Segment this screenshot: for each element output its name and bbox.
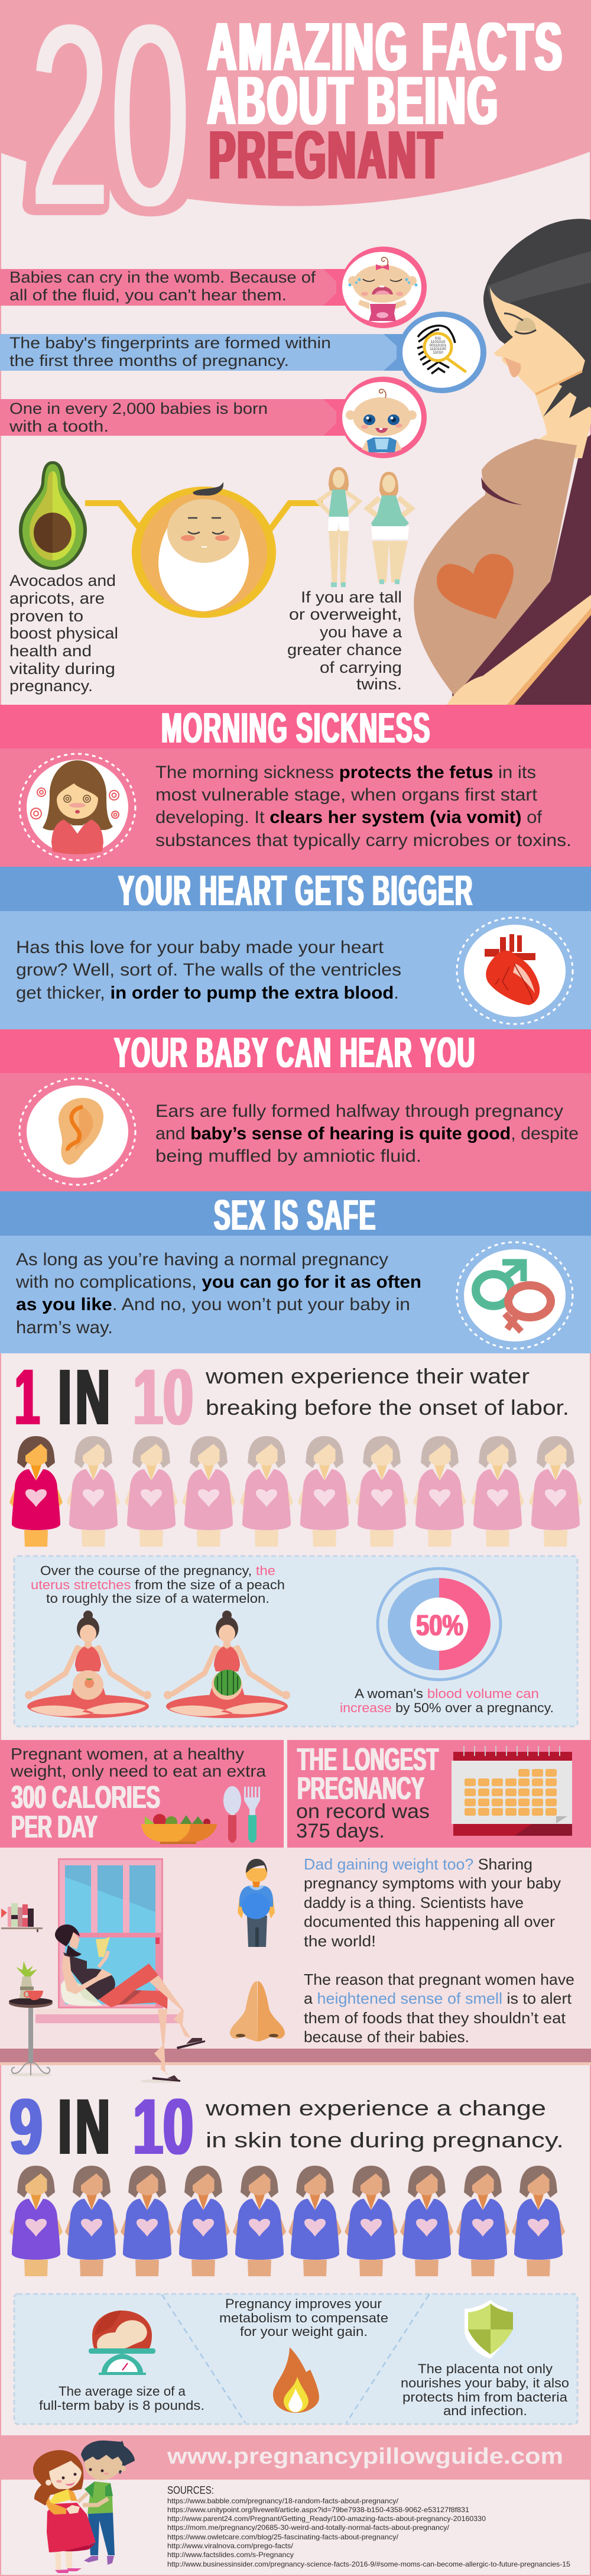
- icon: flame: [273, 2347, 319, 2413]
- text: The morning sickness protects the fetus in its: [155, 763, 536, 782]
- text: avocados: Avocados and: [9, 572, 116, 589]
- text: [155, 763, 571, 850]
- text: metabolism: metabolism to compensate: [219, 2311, 388, 2325]
- panel: 300 calories: weight, only need to eat an extra: [10, 1762, 266, 1780]
- text: as you like . And no, you won’t put your baby in: [16, 1295, 410, 1314]
- dashed panel: baby size, metabolism, placenta: [14, 2294, 577, 2424]
- panel: longest pregnancy: PREGNANCY: [297, 1771, 424, 1806]
- icon: shield: [465, 2300, 517, 2358]
- sources list: [167, 2484, 570, 2568]
- stat: 9 in 10: in skin tone during pregnancy.: [206, 2128, 564, 2152]
- stat: 1 in 10: 10: [133, 1353, 193, 1441]
- sources list: http://www.viralnova.com/prego-facts/: [167, 2542, 294, 2550]
- text: uterus: uterus stretches from the size of a peach: [31, 1577, 285, 1592]
- panel: 300 calories: 300 CALORIES: [11, 1780, 160, 1815]
- text: metabolism: Pregnancy improves your: [225, 2296, 382, 2311]
- text: placenta: nourishes your baby, it also: [401, 2376, 569, 2390]
- icon: gender symbols: [457, 1242, 573, 1349]
- text: average size: full-term baby is 8 pounds.: [39, 2398, 204, 2413]
- illustration: bookshelf: [1, 1903, 43, 1932]
- icon: salad bowl: [141, 1814, 217, 1844]
- text: sense of smell: The reason that pregnant women have: [304, 1971, 574, 1988]
- pictogram row: 1 of 10 women: [9, 1436, 582, 1547]
- icon: yoga woman with watermelon: [164, 1611, 290, 1718]
- text: uterus: to roughly the size of a watermelon.: [46, 1591, 269, 1606]
- icon: fingerprint under magnifier: 11101100: [430, 347, 446, 351]
- text: substances that typically carry microbes or toxins.: [155, 831, 571, 850]
- chart: 50 percent donut: [378, 1569, 501, 1680]
- text: sense of smell: because of their babies.: [304, 2028, 469, 2046]
- panel: sex is safe: [0, 1191, 591, 1353]
- ribbon: fingerprints: [0, 334, 408, 371]
- text: placenta: and infection.: [443, 2403, 527, 2418]
- panel: 300 calories: Pregnant women, at a healthy: [11, 1745, 244, 1763]
- panel: your baby can hear you: [0, 1029, 591, 1191]
- text: uterus: [31, 1563, 285, 1606]
- icon: fingerprint under magnifier: 11010: [433, 351, 443, 355]
- text: blood volume: A woman's blood volume can: [355, 1686, 539, 1701]
- text: avocados: [9, 572, 118, 695]
- text: average size: The average size of a: [59, 2384, 186, 2399]
- text: twins: greater chance: [287, 641, 402, 659]
- text: blood volume: increase by 50% over a pregnancy.: [340, 1700, 554, 1715]
- text: [15, 1250, 421, 1337]
- sources list: https://mom.me/pregnancy/20685-30-weird-and-totally-normal-facts-about-pregnancy/: [167, 2523, 450, 2532]
- sources list: http://www.parent24.com/Pregnant/Getting_Ready/100-amazing-facts-about-pregnancy-20160330: [167, 2515, 486, 2523]
- text: Ears are fully formed halfway through pregnancy: [155, 1101, 563, 1121]
- text: twins: twins.: [356, 675, 402, 693]
- sources list: http://www.factslides.com/s-Pregnancy: [167, 2551, 294, 2559]
- text: dad weight: daddy is a thing. Scientists have: [304, 1894, 524, 1911]
- header banner: [0, 0, 591, 216]
- footer band with website: www.pregnancypillowguide.com: [167, 2444, 563, 2469]
- sources list: https://www.unitypoint.org/livewell/article.aspx?id=79be7938-b150-4358-9062-e53127f8f831: [167, 2506, 469, 2514]
- ribbon: babies cry: all of the fluid, you can't hear them.: [9, 286, 287, 304]
- icon: fingerprint under magnifier: [398, 312, 486, 393]
- text: [16, 938, 401, 1003]
- stat: 9 in 10: women experience a change: [205, 2096, 546, 2120]
- sources list: https://www.babble.com/pregnancy/18-random-facts-about-pregnancy/: [167, 2497, 399, 2505]
- text: [155, 1101, 579, 1166]
- text: metabolism: [219, 2296, 388, 2339]
- ribbon: fingerprints: the first three months of pregnancy.: [9, 352, 289, 370]
- stat: 9 in 10: [9, 2083, 564, 2171]
- panel: 300 calories: PER DAY: [11, 1809, 98, 1845]
- panel: longest pregnancy: [287, 1740, 591, 1848]
- icon: fingerprint under magnifier: 011: [435, 336, 441, 341]
- illustration: pregnant woman reading at window: [35, 1858, 205, 2083]
- heading: SEX IS SAFE: [214, 1192, 376, 1239]
- icon: spoon and fork: [223, 1786, 260, 1843]
- text: dad weight: pregnancy symptoms with your baby: [304, 1874, 561, 1892]
- panel: 300 calories: [0, 1740, 284, 1848]
- text: twins: you have a: [320, 623, 402, 641]
- stat: 1 in 10: women experience their water: [205, 1364, 530, 1388]
- stat: 9 in 10: 10: [133, 2083, 193, 2171]
- connector lines: [85, 503, 323, 535]
- text: placenta: [401, 2361, 569, 2418]
- text: harm’s way.: [16, 1318, 113, 1337]
- stat: 1 in 10: 1: [15, 1353, 40, 1441]
- panel: morning sickness: [0, 705, 591, 867]
- title: [207, 8, 564, 193]
- text: sense of smell: [304, 1971, 574, 2046]
- text: metabolism: for your weight gain.: [240, 2324, 368, 2339]
- icon: nose: [230, 1981, 285, 2042]
- large pregnant woman illustration: [414, 219, 591, 705]
- text: avocados: vitality during: [9, 660, 115, 678]
- room scene background: [0, 1848, 591, 2065]
- ribbon: fingerprints: The baby's fingerprints are formed within: [9, 334, 331, 352]
- icon: baby with tooth: [340, 377, 427, 458]
- stat: 9 in 10: 9: [9, 2083, 43, 2171]
- text: average size: [39, 2384, 204, 2413]
- ribbon: tooth: One in every 2,000 babies is born: [9, 400, 268, 417]
- icon: avocado: [19, 461, 87, 570]
- stat: 1 in 10: IN: [58, 1353, 114, 1441]
- icon: yoga woman with peach: [25, 1611, 151, 1718]
- text: twins: or overweight,: [289, 605, 402, 623]
- panel: longest pregnancy: on record was: [296, 1800, 430, 1823]
- ribbon: babies cry: Babies can cry in the womb. Because of: [9, 268, 316, 286]
- icon: dizzy girl: [20, 754, 135, 860]
- stat: 1 in 10: breaking before the onset of labor.: [206, 1395, 569, 1420]
- illustration: side table with plant and cup: [9, 1961, 53, 2076]
- text: grow? Well, sort of. The walls of the ventricles: [16, 960, 401, 980]
- text: twins: [287, 588, 402, 693]
- icon: swaddled baby: [132, 482, 276, 618]
- text: avocados: proven to: [9, 607, 83, 625]
- text: sense of smell: them of foods that they shouldn’t eat: [304, 2009, 566, 2027]
- text: blood volume: [340, 1686, 554, 1715]
- panel: your heart gets bigger: [0, 867, 591, 1029]
- chart: 50 percent donut: 50%: [416, 1609, 463, 1642]
- text: being muffled by amniotic fluid.: [155, 1146, 421, 1166]
- text: avocados: boost physical: [9, 624, 118, 642]
- text: placenta: The placenta not only: [418, 2361, 553, 2376]
- icon: tall and overweight women: [318, 467, 411, 587]
- pictogram row: 9 of 10 women: [9, 2166, 565, 2276]
- text: sense of smell: a heightened sense of smell is to alert: [304, 1989, 572, 2007]
- text: twins: of carrying: [320, 659, 402, 676]
- icon: dad with belly: [238, 1859, 275, 1947]
- text: dad weight: the world!: [304, 1932, 376, 1950]
- ribbon: babies cry: [0, 268, 349, 306]
- text: developing. It clears her system (via vomit) of: [155, 808, 543, 827]
- icon: crying baby: [340, 247, 427, 328]
- ribbon: tooth: [0, 399, 349, 436]
- panel: longest pregnancy: THE LONGEST: [297, 1742, 439, 1777]
- text: avocados: pregnancy.: [9, 677, 93, 695]
- text: twins: If you are tall: [301, 588, 402, 606]
- ribbon: tooth: with a tooth.: [9, 417, 109, 435]
- text: avocados: health and: [9, 642, 92, 660]
- text: placenta: protects him from bacteria: [402, 2390, 568, 2405]
- sources list: http://www.businessinsider.com/pregnancy-science-facts-2016-9/#some-moms-can-become-allergic-to-future-pregnancies-15: [167, 2560, 570, 2568]
- stat: 9 in 10: IN: [58, 2083, 114, 2171]
- panel: longest pregnancy: 375 days.: [296, 1820, 385, 1842]
- icon: fingerprint under magnifier: 1101010: [431, 340, 446, 344]
- text: with no complications, you can go for it as often: [15, 1272, 421, 1292]
- icon: ear: [20, 1078, 135, 1185]
- text: dad weight: [304, 1855, 561, 1950]
- text: dad weight: Dad gaining weight too? Sharing: [304, 1855, 532, 1873]
- dashed panel: uterus and blood volume: [14, 1556, 577, 1726]
- text: uterus: Over the course of the pregnancy, the: [40, 1563, 275, 1578]
- text: get thicker, in order to pump the extra blood .: [16, 983, 399, 1003]
- text: avocados: apricots, are: [9, 589, 105, 607]
- icon: baby on scale: [89, 2311, 155, 2375]
- icon: fingerprint under magnifier: 00110101: [430, 344, 447, 348]
- text: As long as you’re having a normal pregnancy: [16, 1250, 388, 1269]
- sources list: https://www.owletcare.com/blog/25-fascinating-facts-about-pregnancy/: [167, 2533, 399, 2541]
- stat: 1 in 10: [15, 1353, 569, 1441]
- text: most vulnerable stage, when organs first start: [155, 785, 538, 805]
- sources list: SOURCES:: [167, 2484, 214, 2496]
- icon: anatomical heart: [457, 918, 573, 1024]
- text: and baby’s sense of hearing is quite good, despite: [155, 1124, 579, 1143]
- text: Has this love for your baby made your heart: [16, 938, 384, 957]
- footer band with website: [0, 2435, 591, 2480]
- text: dad weight: documented this happening all over: [304, 1913, 555, 1930]
- illustration: couple: [33, 2441, 135, 2573]
- icon: calendar: [452, 1746, 572, 1836]
